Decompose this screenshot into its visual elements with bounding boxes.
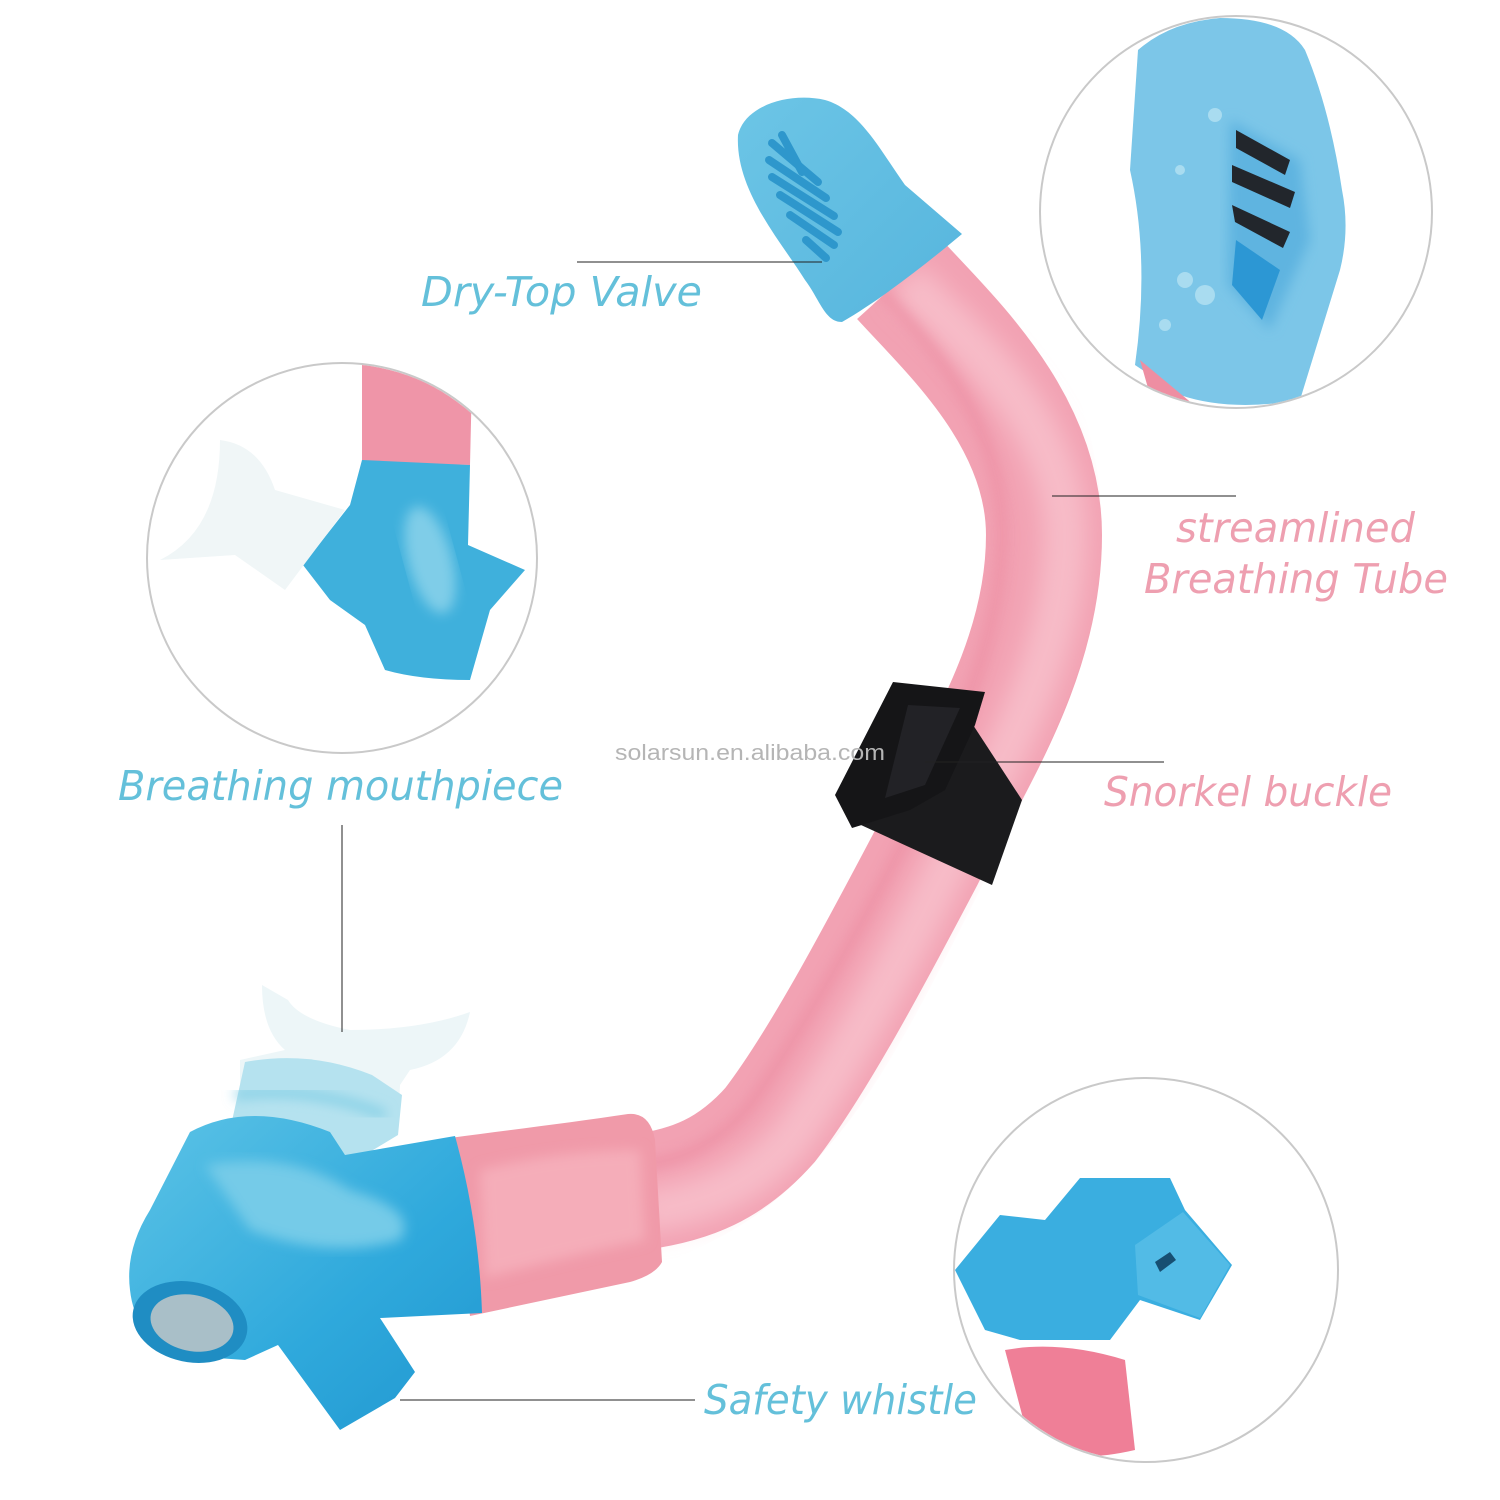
label: dry-top valve: Dry-Top Valve xyxy=(421,268,702,316)
label: snorkel buckle: Snorkel buckle xyxy=(1104,768,1392,816)
detail circle: mouthpiece xyxy=(147,360,537,753)
snorkel buckle xyxy=(835,682,1022,885)
label: streamlined breathing tube: streamlined xyxy=(1176,504,1416,552)
leader lines xyxy=(342,262,1236,1400)
label: breathing mouthpiece: Breathing mouthpiece xyxy=(118,762,563,810)
label: streamlined breathing tube: Breathing Tube xyxy=(1144,555,1448,603)
blue valve body xyxy=(125,1116,482,1430)
water droplets xyxy=(1159,108,1222,331)
mouthpiece xyxy=(230,985,470,1170)
detail circle: whistle xyxy=(954,1078,1338,1462)
main snorkel product xyxy=(125,98,1065,1430)
watermark: solarsun.en.alibaba.com xyxy=(615,740,885,765)
detail circle: dry-top valve xyxy=(1040,16,1432,410)
breathing tube xyxy=(450,280,1065,1316)
label: safety whistle: Safety whistle xyxy=(704,1376,977,1424)
dry-top valve xyxy=(738,98,962,322)
label: streamlined breathing tube xyxy=(1144,504,1448,603)
